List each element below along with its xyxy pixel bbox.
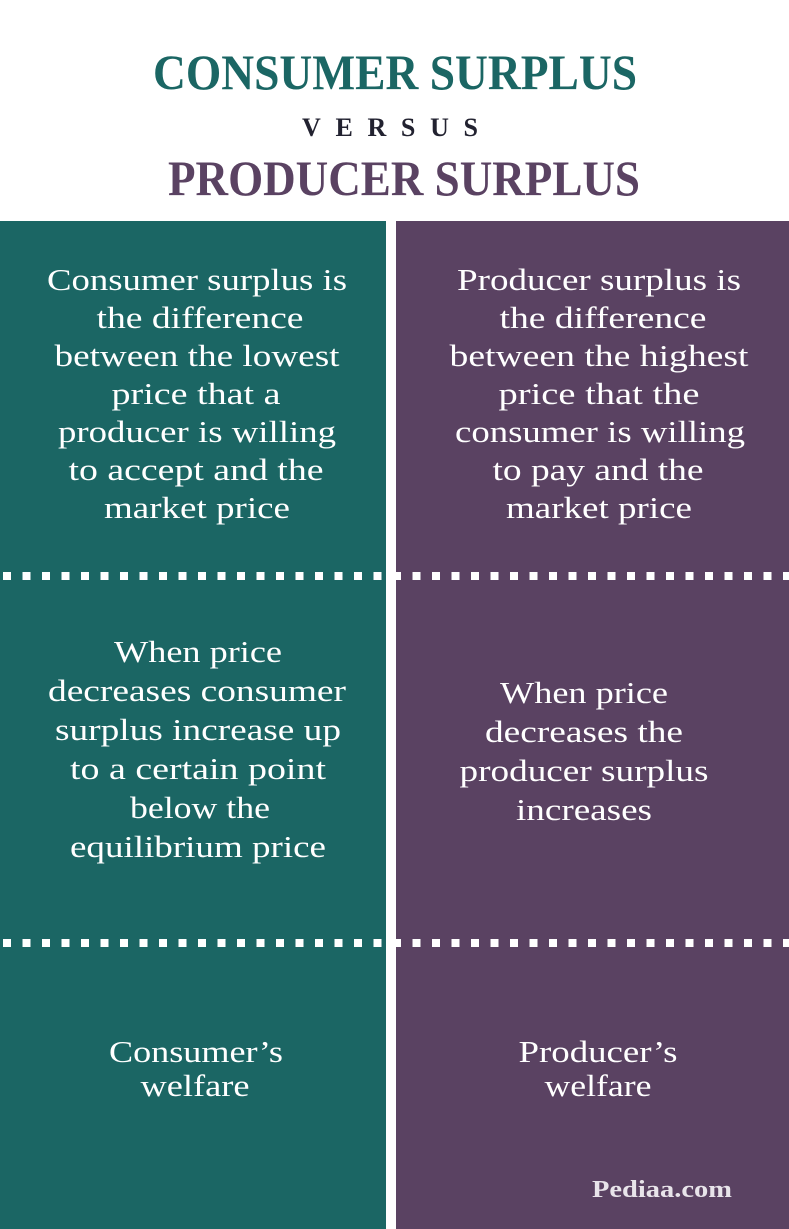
text: consumer definition bbox=[47, 262, 347, 525]
text: producer definition bbox=[450, 262, 749, 525]
text: consumer price effect: equilibrium price bbox=[70, 829, 326, 864]
panel: consumer column bbox=[0, 221, 386, 1229]
logo: pediaa.com: Pediaa.com bbox=[592, 1177, 732, 1203]
text: consumer definition: the difference bbox=[96, 300, 304, 335]
title: versus: VERSUS bbox=[302, 113, 478, 142]
text: producer definition: the difference bbox=[500, 300, 706, 335]
text: consumer welfare: welfare bbox=[140, 1068, 250, 1103]
text: producer welfare bbox=[518, 1034, 678, 1103]
title: consumer surplus: CONSUMER SURPLUS bbox=[153, 44, 637, 100]
title: producer surplus: PRODUCER SURPLUS bbox=[168, 150, 640, 206]
text: producer welfare: welfare bbox=[544, 1068, 652, 1103]
text: consumer definition: between the lowest bbox=[54, 338, 340, 373]
text: consumer welfare: Consumer’s bbox=[109, 1034, 283, 1069]
text: consumer price effect: below the bbox=[130, 790, 270, 825]
text: consumer definition: producer is willing bbox=[58, 414, 336, 449]
text: producer price effect: decreases the bbox=[485, 714, 683, 749]
text: consumer price effect: to a certain point bbox=[70, 751, 326, 786]
text: producer welfare: Producer’s bbox=[518, 1034, 678, 1069]
text: producer price effect bbox=[460, 675, 708, 827]
text: consumer price effect: surplus increase up bbox=[55, 712, 341, 747]
text: producer definition: to pay and the bbox=[492, 452, 704, 487]
text: consumer definition: Consumer surplus is bbox=[47, 262, 347, 297]
text: producer price effect: producer surplus bbox=[460, 753, 708, 788]
text: consumer price effect bbox=[48, 634, 347, 864]
panel: producer column bbox=[396, 221, 789, 1229]
text: consumer price effect: When price bbox=[114, 634, 282, 669]
text: consumer definition: to accept and the bbox=[68, 452, 324, 487]
text: producer definition: market price bbox=[506, 490, 692, 525]
text: producer price effect: increases bbox=[516, 792, 652, 827]
text: producer definition: consumer is willing bbox=[455, 414, 745, 449]
text: consumer price effect: decreases consumer bbox=[48, 673, 347, 708]
title bbox=[153, 44, 640, 206]
text: producer price effect: When price bbox=[500, 675, 668, 710]
text: producer definition: Producer surplus is bbox=[457, 262, 741, 297]
text: consumer definition: price that a bbox=[112, 376, 281, 411]
text: consumer welfare bbox=[109, 1034, 283, 1103]
text: producer definition: between the highest bbox=[450, 338, 749, 373]
text: consumer definition: market price bbox=[104, 490, 290, 525]
text: producer definition: price that the bbox=[498, 376, 700, 411]
